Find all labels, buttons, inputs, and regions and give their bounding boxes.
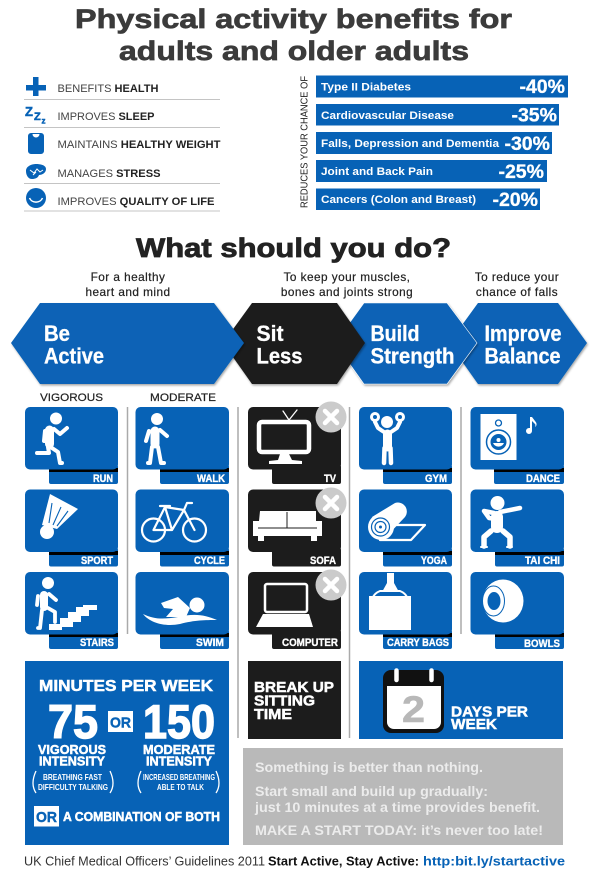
title xyxy=(75,4,513,66)
hexagon: build strength: Build xyxy=(370,321,420,346)
hexagon: build strength: Strength xyxy=(370,344,454,368)
tile: sport: SPORT xyxy=(81,555,113,567)
number: 150: 150 xyxy=(143,695,215,748)
tile: gym: GYM xyxy=(425,473,447,485)
tile: cycle xyxy=(136,490,229,567)
tile: carry bags: CARRY BAGS xyxy=(387,637,449,649)
text: maintains healthy weight: MAINTAINS HEALTHY WEIGHT xyxy=(58,139,221,151)
hexagon: sit less: Sit xyxy=(256,321,284,346)
panel: encouragement: MAKE A START TODAY: it’s never too late! xyxy=(255,823,543,838)
hexagon: improve balance xyxy=(449,303,587,384)
label: moderate intensity xyxy=(143,743,215,768)
number: 75: 75 xyxy=(48,695,98,748)
label: moderate intensity: MODERATE xyxy=(143,743,215,757)
tile: walk xyxy=(136,407,229,485)
tile: run: RUN xyxy=(93,473,113,485)
tile: yoga xyxy=(359,490,452,567)
icon: health cross xyxy=(26,77,46,96)
note: breathing fast: DIFFICULTY TALKING xyxy=(38,782,108,792)
footer: source and link: http:bit.ly/startactive xyxy=(423,854,565,868)
panel: encouragement: just 10 minutes at a time provides benefit. xyxy=(254,800,540,815)
panel: risk reduction bars xyxy=(300,76,568,211)
tile: dance xyxy=(470,407,564,485)
bar: joint and back pain xyxy=(316,160,547,183)
tile: sofa xyxy=(248,490,341,567)
subheading: heart and mind: heart and mind xyxy=(86,285,170,299)
footer: source and link: Start Active, Stay Active: xyxy=(268,854,419,868)
hexagon: build strength xyxy=(335,303,477,384)
label: vigorous: VIGOROUS xyxy=(40,392,103,404)
icon: calendar: 2 xyxy=(402,689,425,730)
subheading: reduce falls: chance of falls xyxy=(476,285,558,299)
icon: sleep: Z xyxy=(34,111,41,123)
text: improves sleep: IMPROVES SLEEP xyxy=(58,111,154,123)
badge: or combination: OR xyxy=(36,809,57,826)
tile: carry bags xyxy=(359,572,452,649)
badge: or: OR xyxy=(110,714,131,732)
tile: stairs xyxy=(25,572,118,649)
note: breathing fast xyxy=(33,771,113,793)
hexagon: sit less: Less xyxy=(256,344,302,368)
tile: gym xyxy=(359,407,452,485)
panel: break up sitting time: BREAK UP xyxy=(254,679,334,696)
bar: falls, depression and dementia: -30% xyxy=(504,133,550,155)
footer: source and link: UK Chief Medical Officers’ Guidelines 2011 xyxy=(24,854,265,868)
icon: brain xyxy=(26,164,46,179)
icon: no tv xyxy=(316,402,346,432)
tile: cycle: CYCLE xyxy=(194,555,225,567)
label: moderate: MODERATE xyxy=(150,392,216,404)
bar: falls, depression and dementia: Falls, Depression and Dementia xyxy=(321,138,500,150)
text: benefits health: BENEFITS HEALTH xyxy=(58,83,159,95)
bar: cancers xyxy=(316,188,540,211)
panel: encouragement xyxy=(243,748,563,845)
tile: computer: COMPUTER xyxy=(282,637,338,649)
panel: minutes per week xyxy=(25,661,229,845)
hexagon: improve balance: Improve xyxy=(484,321,562,346)
bar: type II diabetes: -40% xyxy=(519,76,565,98)
tile: tv: TV xyxy=(324,473,337,485)
tile: bowls xyxy=(470,572,564,650)
tile: sport xyxy=(25,490,118,567)
title: Physical activity benefits for xyxy=(75,4,513,34)
note: increased breathing xyxy=(138,771,219,793)
heading: minutes per week: MINUTES PER WEEK xyxy=(39,678,213,695)
bar: cancers: Cancers (Colon and Breast) xyxy=(321,194,476,206)
text: manages stress: MANAGES STRESS xyxy=(58,168,160,180)
tile: tv xyxy=(248,407,341,485)
icon: no computer xyxy=(316,570,346,600)
tile: bowls: BOWLS xyxy=(524,638,560,650)
label: vigorous intensity xyxy=(38,743,106,768)
panel: encouragement: Start small and build up gradually: xyxy=(255,784,488,799)
label: vigorous intensity: INTENSITY xyxy=(39,754,106,768)
subheading: heart and mind: For a healthy xyxy=(91,270,165,284)
icon: calendar xyxy=(383,670,444,733)
subheading: muscles and bones: bones and joints strong xyxy=(281,285,413,299)
tile: tai chi xyxy=(470,490,564,567)
tile: swim xyxy=(136,572,229,649)
hexagon: sit less xyxy=(223,303,365,384)
icon: weighing scale xyxy=(28,133,44,154)
bar: type II diabetes xyxy=(316,76,568,98)
subheading: reduce falls: To reduce your xyxy=(475,270,559,284)
title: adults and older adults xyxy=(119,36,469,66)
bar: joint and back pain: Joint and Back Pain xyxy=(321,166,433,178)
bar: cancers: -20% xyxy=(492,189,538,211)
panel: two days per week xyxy=(359,661,563,739)
panel: encouragement: Something is better than nothing. xyxy=(255,760,483,775)
icon: smile xyxy=(26,188,46,208)
text: days per week xyxy=(451,704,528,733)
heading: what should you do: What should you do? xyxy=(136,233,451,263)
panel: break up sitting time: TIME xyxy=(254,706,292,723)
tile: walk: WALK xyxy=(197,473,225,485)
note: increased breathing: INCREASED BREATHING xyxy=(143,772,215,782)
hexagon: be active: Be xyxy=(44,321,70,346)
tile: swim: SWIM xyxy=(196,637,224,649)
panel: break up sitting time xyxy=(248,661,341,739)
icon: sleep xyxy=(25,104,46,126)
bar: falls, depression and dementia xyxy=(316,132,552,155)
icon: sleep: z xyxy=(42,116,46,126)
note: breathing fast: BREATHING FAST xyxy=(43,772,103,782)
note: increased breathing: ABLE TO TALK xyxy=(157,782,205,792)
footer: source and link xyxy=(24,854,565,868)
icon: no sofa xyxy=(316,488,346,518)
panel: benefits list xyxy=(24,77,221,211)
tile: yoga: YOGA xyxy=(421,555,447,567)
bar: type II diabetes: Type II Diabetes xyxy=(321,82,411,94)
bar: cardiovascular disease: -35% xyxy=(511,104,557,126)
label: vigorous intensity: VIGOROUS xyxy=(38,743,106,757)
bar: joint and back pain: -25% xyxy=(498,161,544,183)
tile: computer xyxy=(248,572,341,649)
tile: tai chi: TAI CHI xyxy=(525,555,560,567)
hexagon: improve balance: Balance xyxy=(484,344,560,368)
panel: break up sitting time: SITTING xyxy=(254,692,315,710)
label: reduces your chance of: REDUCES YOUR CHANCE OF xyxy=(300,76,310,208)
tile: dance: DANCE xyxy=(526,473,560,485)
tile: stairs: STAIRS xyxy=(80,637,114,649)
hexagon: be active: Active xyxy=(44,344,104,368)
tile: run xyxy=(25,407,118,485)
tile: sofa: SOFA xyxy=(310,555,336,567)
text: a combination of both: A COMBINATION OF BOTH xyxy=(63,809,220,824)
text: days per week: DAYS PER xyxy=(451,704,528,720)
bar: cardiovascular disease: Cardiovascular Disease xyxy=(321,110,454,122)
hexagon: be active xyxy=(11,303,244,384)
text: days per week: WEEK xyxy=(451,716,497,733)
bar: cardiovascular disease xyxy=(316,104,559,126)
text: improves quality of life: IMPROVES QUALITY OF LIFE xyxy=(58,196,214,208)
subheading: muscles and bones: To keep your muscles, xyxy=(284,270,410,284)
label: moderate intensity: INTENSITY xyxy=(146,754,213,768)
icon: sleep: Z xyxy=(25,104,33,119)
